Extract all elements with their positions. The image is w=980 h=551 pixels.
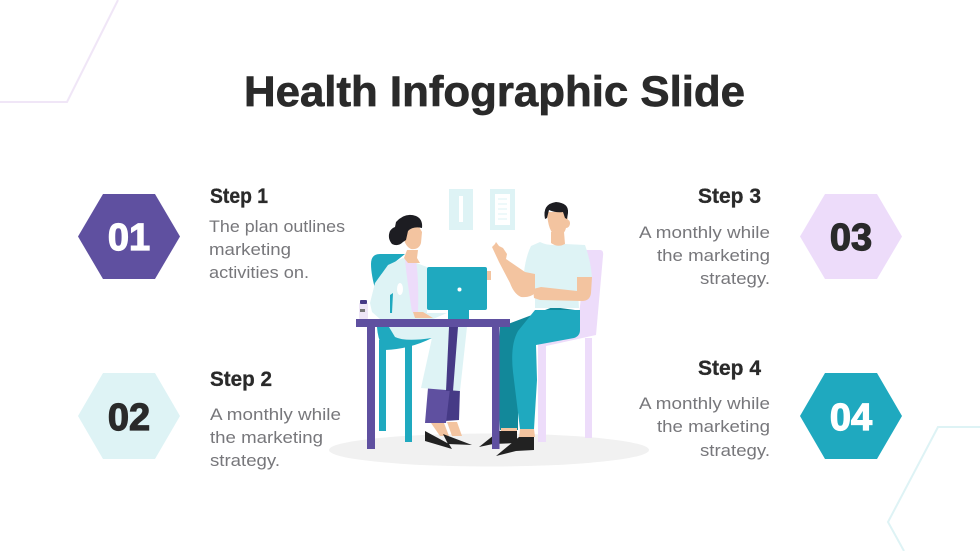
neck: [551, 232, 565, 246]
icon: hexagon 04: 04: [830, 397, 872, 439]
floor shadow: [329, 434, 649, 466]
icon: wall charts: [449, 189, 515, 230]
icon: hexagon 03: 03: [830, 217, 872, 259]
text: step 2 description: the marketing: [210, 428, 323, 447]
doctor chair: [371, 254, 433, 442]
icon: hexagon 01: [78, 194, 180, 279]
text: step 4 description: [639, 394, 770, 460]
icon: hexagon 03: [800, 194, 902, 279]
panel: step 2: [78, 368, 341, 470]
raised arm: [492, 242, 535, 297]
panel: step 1: [78, 185, 345, 282]
doctor: [370, 215, 472, 449]
text: step 4 description: A monthly while: [639, 394, 770, 413]
hair: [389, 215, 422, 245]
hair: [544, 202, 568, 219]
heading: step 3: Step 3: [698, 185, 761, 208]
text: step 3 description: strategy.: [700, 269, 770, 288]
heading: step 2: Step 2: [210, 368, 272, 391]
icon: hexagon 01: 01: [108, 217, 150, 259]
text: step 4 description: the marketing: [657, 417, 770, 436]
text: step 1 description: [209, 217, 345, 282]
desk: [356, 319, 510, 449]
text: step 4 description: strategy.: [700, 441, 770, 460]
monitor: [427, 267, 491, 320]
icon: hexagon 04: [800, 373, 902, 459]
lab coat upper: [370, 258, 447, 319]
shirt: [524, 242, 592, 308]
patient chair: [538, 250, 603, 442]
illustration: doctor and patient at desk: [329, 189, 649, 466]
lab coat lower: [389, 327, 467, 391]
folded arm: [533, 277, 592, 301]
panel: step 4: [639, 357, 902, 460]
heading: step 4: Step 4: [698, 357, 761, 380]
text: step 3 description: [639, 223, 770, 288]
icon: pill bottle: [359, 300, 368, 319]
text: step 2 description: strategy.: [210, 451, 280, 470]
trousers and shoes: [431, 422, 462, 436]
face: [403, 225, 422, 249]
panel: step 3: [639, 185, 902, 288]
back leg: [498, 307, 575, 430]
text: step 3 description: A monthly while: [639, 223, 770, 242]
text: step 3 description: the marketing: [657, 246, 770, 265]
head: [547, 212, 570, 236]
text: step 1 description: The plan outlines: [209, 217, 345, 236]
heading: step 1: Step 1: [210, 185, 268, 208]
title: Health Infographic Slide: [244, 68, 745, 116]
patient: [479, 202, 592, 456]
icon: hexagon 02: 02: [108, 397, 150, 439]
text: step 1 description: marketing: [209, 240, 291, 259]
text: step 2 description: A monthly while: [210, 405, 341, 424]
front leg: [512, 310, 580, 429]
text: step 1 description: activities on.: [209, 263, 309, 282]
icon: hexagon 02: [78, 373, 180, 459]
text: step 2 description: [210, 405, 341, 470]
ankles and shoes: [501, 428, 535, 437]
